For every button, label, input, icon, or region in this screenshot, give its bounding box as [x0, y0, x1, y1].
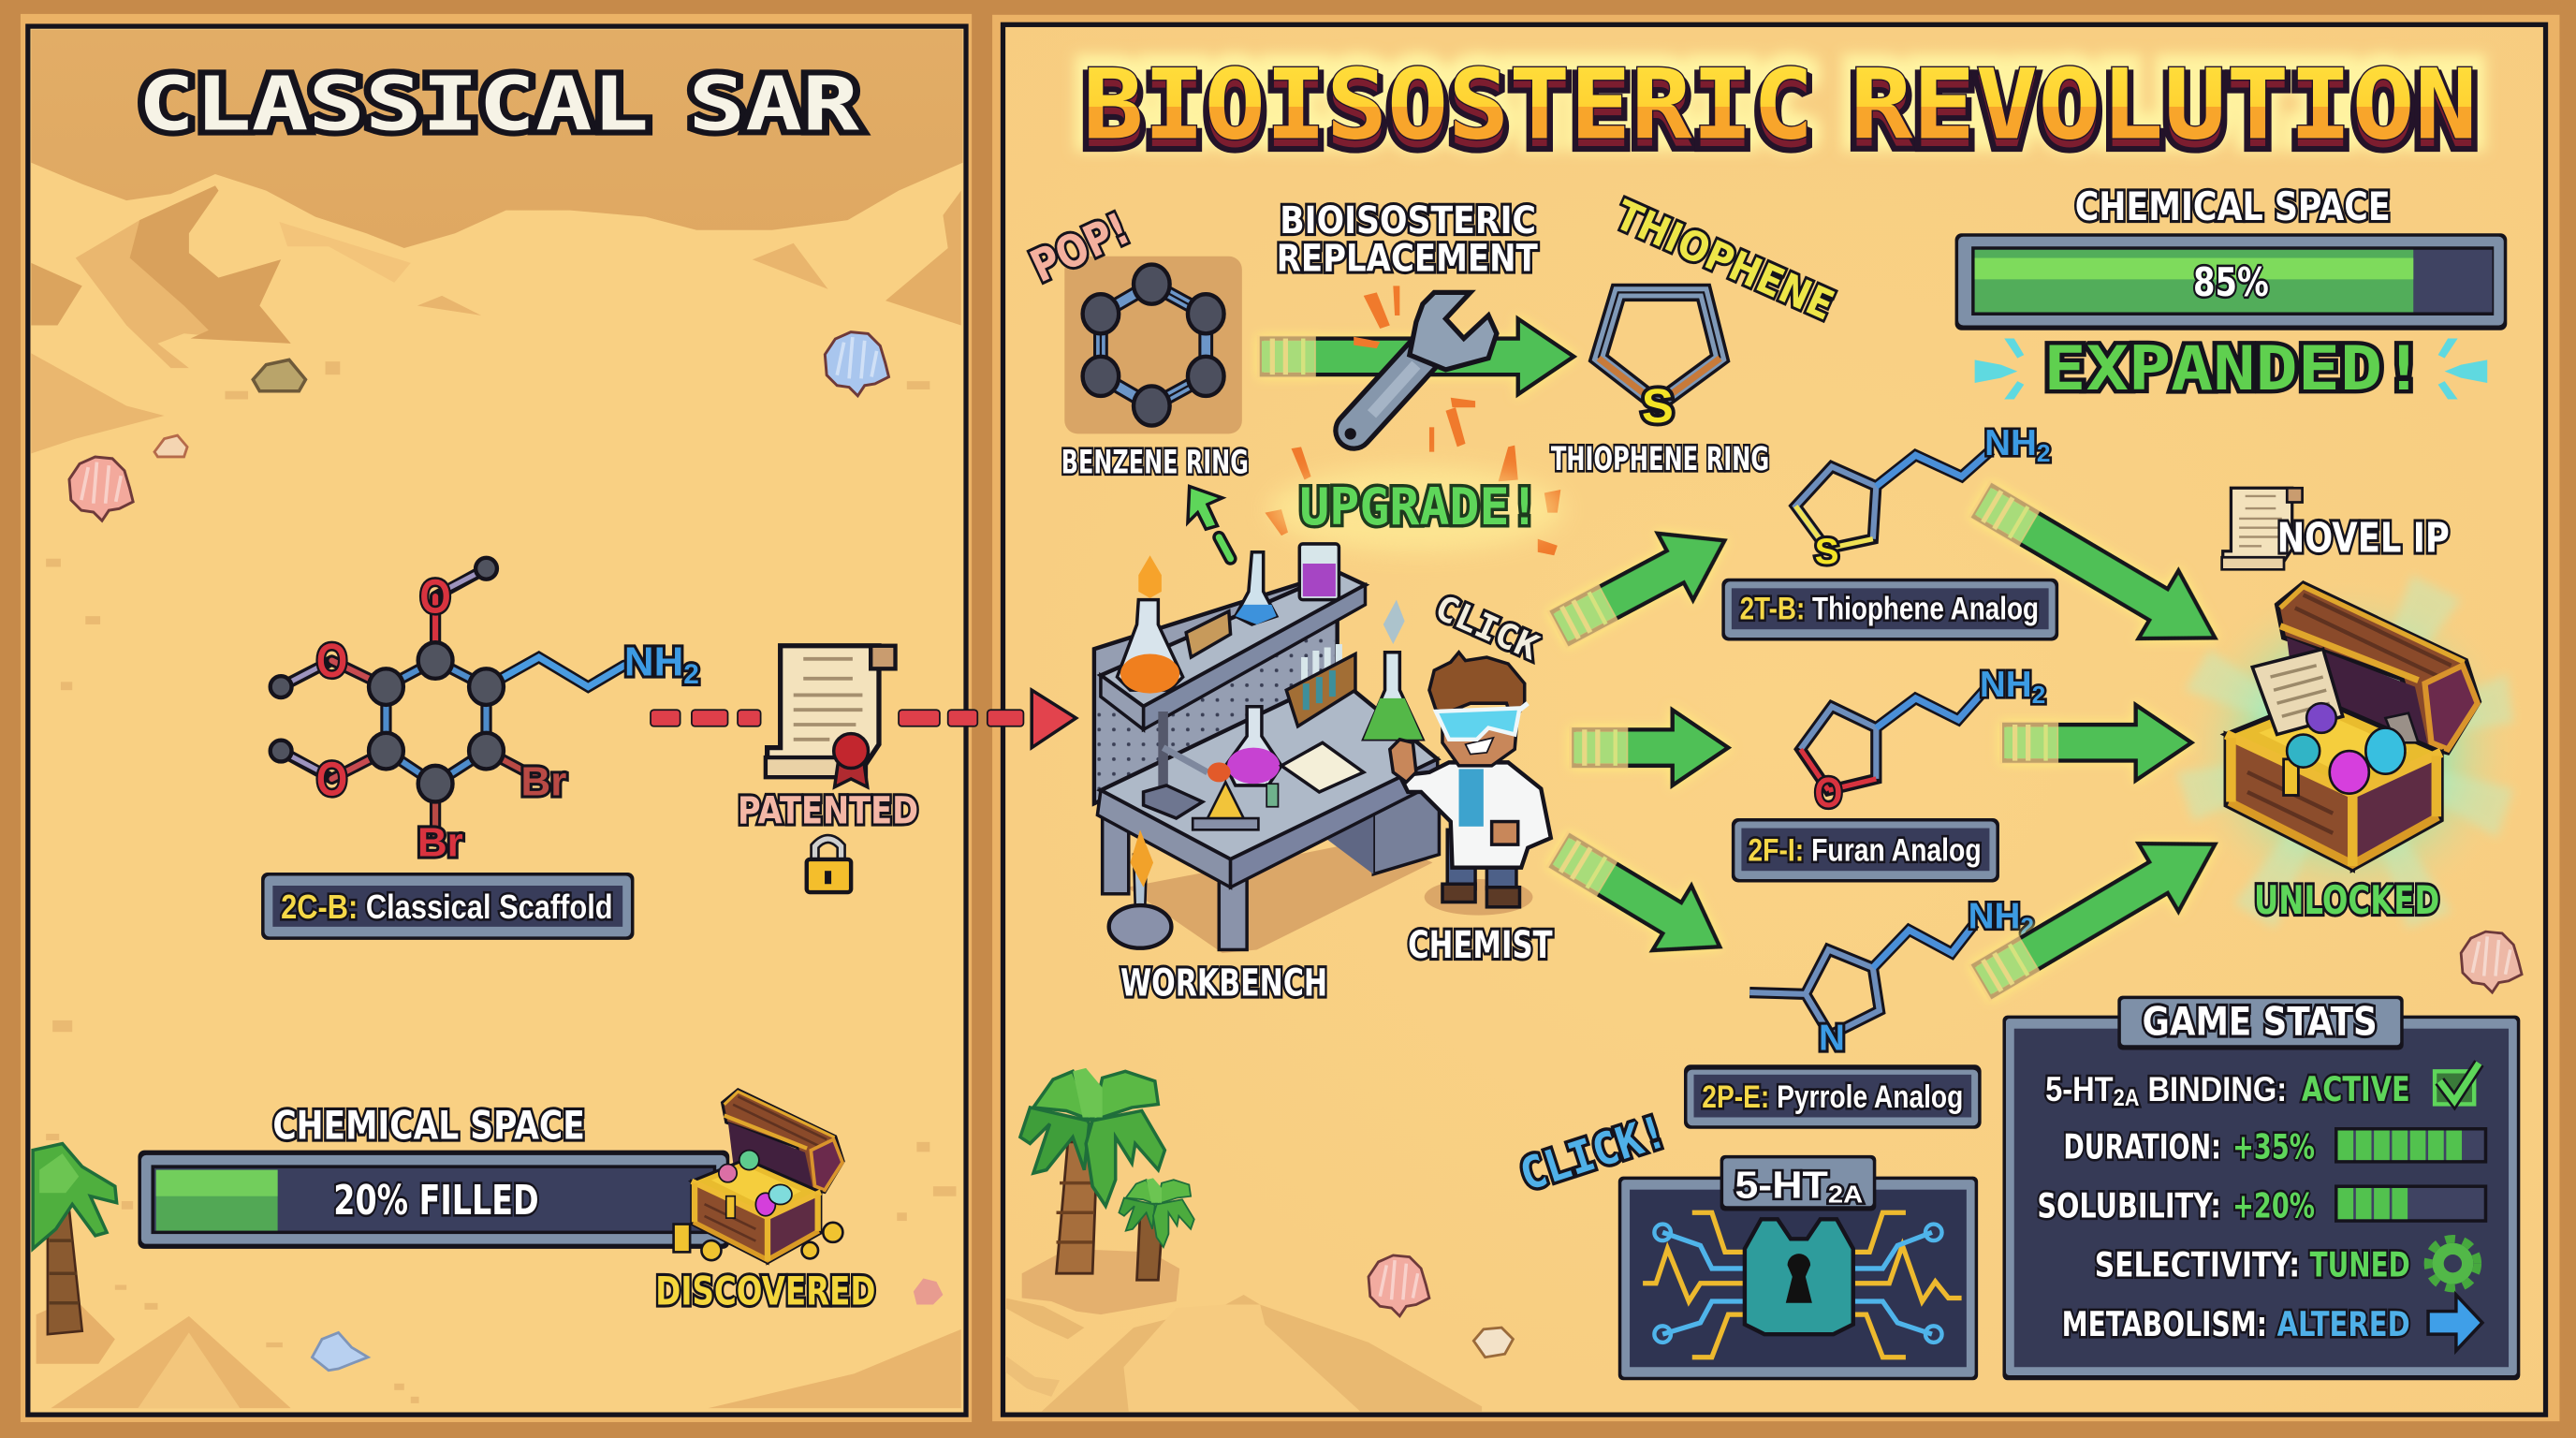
- keyhole: [1786, 1254, 1812, 1303]
- palm left: [33, 1144, 117, 1334]
- label: 2F-I furan analog: 2F-I: Furan Analog: [1748, 833, 1982, 869]
- thiophene ring: S: [1642, 379, 1674, 433]
- stat: duration: DURATION:: [2063, 1126, 2221, 1167]
- shell: small peach: [154, 435, 187, 457]
- rack with test tubes: [1286, 644, 1355, 726]
- bunsen on bench: [1193, 782, 1258, 829]
- text: click blue: CLICK!: [1514, 1106, 1674, 1201]
- burner floor: [1109, 829, 1171, 948]
- shoes: [1442, 884, 1519, 907]
- stat: solubility: +20%: [2232, 1186, 2315, 1226]
- header tab: 5-HT: [1734, 1163, 1819, 1206]
- label: chemical space left: CHEMICAL SPACE: [272, 1102, 585, 1148]
- amine: NH: [624, 638, 683, 684]
- arrow: replacement: [1257, 318, 1573, 394]
- molecule: 2P-E: 2: [2020, 913, 2034, 941]
- text: unlocked: UNLOCKED: [2254, 877, 2439, 923]
- stat: binding: ACTIVE: [2302, 1069, 2410, 1109]
- label: thiophene ring: THIOPHENE RING: [1551, 440, 1769, 478]
- tab: game stats: GAME STATS: [2143, 999, 2378, 1045]
- panel frame left: [22, 15, 971, 1421]
- label: 2P-E pyrrole analog: 2P-E: Pyrrole Analog: [1702, 1079, 1963, 1115]
- header tab: 2A: [1828, 1181, 1863, 1209]
- molecule: 2P-E: [1749, 897, 2034, 1059]
- oxygen left upper: O: [316, 634, 347, 687]
- chip lock: [1745, 1219, 1853, 1334]
- green flask in hand: [1364, 653, 1423, 740]
- arrow: patent to workbench: [899, 690, 1076, 748]
- oxygen top: O: [419, 570, 451, 624]
- ring stand: [1144, 712, 1231, 818]
- coat: [1399, 762, 1551, 868]
- smile: [1466, 738, 1493, 755]
- text: upgrade: UPGRADE!: [1299, 477, 1540, 536]
- title: bioisosteric revolution: BIOISOSTERIC: [1083, 49, 1814, 161]
- shell: pink small: [914, 1278, 943, 1305]
- chemist: [1364, 653, 1551, 916]
- stat: binding: [2045, 1064, 2479, 1111]
- molecule: 2T-B: NH: [1984, 423, 2037, 463]
- molecule: 2F-I: NH: [1980, 665, 2032, 705]
- panel: classical SAR: [22, 15, 971, 1421]
- label: chemist: CHEMIST: [1408, 923, 1553, 967]
- dunes top: [31, 30, 962, 453]
- panel: game stats: [2002, 996, 2520, 1380]
- orange flask with flame: [1117, 555, 1183, 694]
- heading: bioisosteric replacement: REPLACEMENT: [1277, 237, 1538, 281]
- paper on bench: [1281, 742, 1364, 792]
- bench shadow: [1127, 838, 1432, 953]
- small vial: [1266, 784, 1278, 807]
- arrow: to pyrrole analog: [1537, 816, 1739, 979]
- arrow: pyrrole to IP: [1958, 810, 2235, 1018]
- panel frame right: [992, 15, 2559, 1421]
- hair: [1429, 653, 1525, 723]
- dashed arrow: patent segment: [651, 710, 761, 726]
- title: classical SAR: SAR: [688, 62, 859, 148]
- molecule: 2F-I: [1801, 665, 2045, 816]
- text: POP: POP!: [1023, 203, 1137, 293]
- progress bar: 85%: 85%: [2193, 259, 2269, 305]
- molecule: 2C-B: [271, 558, 699, 865]
- stat: solubility: [2037, 1184, 2487, 1226]
- benzene ring: [1064, 257, 1242, 433]
- text: click rotated: CLICK: [1429, 587, 1545, 668]
- title: bioisosteric revolution: [1083, 49, 2478, 169]
- bromine right: Br: [521, 758, 566, 804]
- legs: [1447, 829, 1516, 889]
- oxygen left lower: O: [316, 752, 347, 805]
- workbench: [1094, 544, 1439, 953]
- blue flask: [1236, 552, 1277, 624]
- arrow: up to benzene: [1188, 487, 1231, 559]
- goggles: [1436, 703, 1528, 740]
- bromine bottom: Br: [417, 819, 463, 865]
- smoke: [1383, 600, 1405, 644]
- circuit traces yellow: [1643, 1212, 1962, 1357]
- label: 2T-B thiophene analog: 2T-B: Thiophene Analog: [1740, 592, 2039, 627]
- molecule: 2T-B: 2: [2037, 439, 2051, 467]
- stat: selectivity: TUNED: [2310, 1245, 2410, 1285]
- stat: duration: +35%: [2232, 1126, 2315, 1167]
- bench shelf: [1101, 572, 1365, 707]
- label: 2P-E pyrrole analog: [1684, 1064, 1982, 1129]
- purple beaker: [1299, 544, 1339, 600]
- stat: binding: 2A: [2114, 1086, 2140, 1111]
- carbon atoms: [271, 558, 504, 801]
- sand background left: [28, 26, 966, 1415]
- scroll: novel IP: [2222, 488, 2303, 569]
- face: [1442, 710, 1518, 766]
- bench cabinet: [1373, 772, 1439, 874]
- shell: pink right: [2461, 932, 2522, 992]
- progress bar: 85%: [1955, 233, 2507, 330]
- shadow: [1425, 879, 1533, 916]
- sparkles: expanded: [1975, 339, 2487, 399]
- label: 2T-B thiophene analog: [1721, 579, 2058, 640]
- title: bioisosteric revolution: REVOLUTION: [1850, 49, 2478, 161]
- label: 2C-B classical scaffold: 2C-B: Classical Scaffold: [281, 888, 613, 926]
- arrow: to furan analog: [1569, 710, 1728, 785]
- treasure chest: unlocked: [2226, 583, 2479, 869]
- purple flask: [1225, 707, 1281, 785]
- title: bioisosteric revolution: REVOLUTION: [1850, 57, 2478, 169]
- label: 2F-I furan analog: [1732, 818, 1999, 882]
- stat: metabolism: ALTERED: [2277, 1304, 2410, 1344]
- title: bioisosteric revolution: BIOISOSTERIC: [1083, 57, 1814, 169]
- panel: 5-HT2A receptor: [1618, 1155, 1978, 1380]
- hand on hip: [1492, 822, 1518, 844]
- shell: pale right bottom: [1473, 1328, 1513, 1357]
- stat: binding: BINDING:: [2139, 1070, 2287, 1108]
- header tab: [1720, 1155, 1876, 1211]
- panel: bioisosteric revolution: [899, 15, 2559, 1421]
- title: classical SAR: CLASSICAL: [138, 62, 649, 148]
- bench legs: [1103, 801, 1247, 949]
- rack upper: [1186, 611, 1231, 657]
- icon: wrench: [1345, 292, 1497, 439]
- shell: pink: [69, 457, 133, 521]
- title: bioisosteric revolution: BIOISOSTERIC: [1083, 49, 1814, 161]
- stat: duration: [2063, 1126, 2487, 1167]
- sand specks: [46, 361, 956, 1403]
- molecule: 2P-E: NH: [1969, 897, 2020, 937]
- text: patented: PATENTED: [738, 788, 918, 832]
- text: novel IP: NOVEL IP: [2277, 515, 2450, 563]
- arrow: thiophene to IP: [1958, 464, 2235, 672]
- palm small: [1119, 1178, 1194, 1280]
- circuit traces blue: [1662, 1232, 1932, 1334]
- bench back panel: [1094, 572, 1338, 803]
- sand background right: [1003, 24, 2546, 1415]
- label: workbench: WORKBENCH: [1120, 961, 1327, 1005]
- heading: bioisosteric replacement: BIOISOSTERIC: [1280, 198, 1536, 242]
- stat: metabolism: METABOLISM:: [2062, 1304, 2267, 1344]
- dunes bottom right: [1005, 1249, 1482, 1412]
- shirt: [1459, 769, 1484, 827]
- glow: upgrade: [1268, 466, 1564, 552]
- shell: blue: [825, 332, 889, 396]
- title: bioisosteric revolution: REVOLUTION: [1850, 49, 2478, 161]
- thiophene ring: [1599, 292, 1720, 433]
- stat: metabolism: [2062, 1295, 2482, 1351]
- scroll: patent document: [766, 646, 896, 787]
- shell: pink right bottom: [1368, 1255, 1429, 1316]
- circuit nodes: [1654, 1225, 1942, 1343]
- text: expanded: EXPANDED!: [2043, 334, 2425, 404]
- title: classical SAR: [138, 62, 859, 148]
- stat: selectivity: SELECTIVITY:: [2095, 1245, 2300, 1285]
- sparks: wrench: [1265, 286, 1560, 555]
- hand: [1390, 740, 1416, 782]
- progress bar: 20% filled: 20% FILLED: [333, 1177, 539, 1225]
- bench desktop: [1101, 677, 1438, 859]
- shell: blue bottom: [312, 1332, 368, 1371]
- pegboard dots: [1097, 605, 1334, 800]
- label: 2C-B classical scaffold: [261, 873, 634, 940]
- stat: binding: 5-HT: [2045, 1070, 2122, 1108]
- text: discovered: DISCOVERED: [655, 1269, 875, 1314]
- palm big: [1020, 1068, 1164, 1273]
- progress bar: 20% filled: [138, 1151, 729, 1249]
- stat: solubility: SOLUBILITY:: [2037, 1186, 2221, 1226]
- molecule: 2P-E: N: [1819, 1019, 1845, 1059]
- molecule: 2F-I: 2: [2032, 681, 2045, 709]
- arrow: to thiophene analog: [1539, 507, 1742, 664]
- text: thiophene rotated: THIOPHENE: [1608, 192, 1841, 330]
- amine: 2: [683, 659, 699, 690]
- icon: padlock: [807, 839, 851, 892]
- molecule: 2T-B: S: [1815, 532, 1839, 572]
- treasure chest: discovered: [674, 1090, 843, 1263]
- label: chemical space right: CHEMICAL SPACE: [2075, 183, 2391, 229]
- dunes bottom left: [37, 1299, 961, 1408]
- label: benzene ring: BENZENE RING: [1061, 443, 1249, 481]
- stat: selectivity: [2095, 1239, 2478, 1288]
- shell: tan rock: [253, 360, 305, 391]
- arrow: furan to IP: [1999, 705, 2191, 781]
- molecule: 2T-B: [1795, 423, 2051, 572]
- heading: bioisosteric replacement: [1277, 198, 1538, 281]
- molecule: 2F-I: O: [1815, 769, 1842, 816]
- bonds: [281, 568, 624, 842]
- burst glow: unlocked: [2177, 575, 2522, 929]
